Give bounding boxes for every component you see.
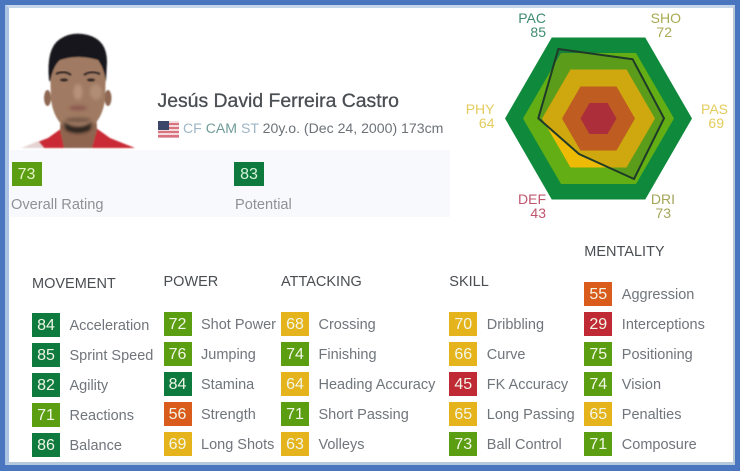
- stat: acceleration: Acceleration: [70, 318, 149, 334]
- stat: agility: Agility: [70, 378, 108, 394]
- stat: volleys: 63: [286, 436, 304, 453]
- stat: finishing: Finishing: [318, 347, 377, 363]
- stat: sprint speed: Sprint Speed: [70, 348, 153, 364]
- stat: volleys: [281, 432, 364, 456]
- heading: attacking: ATTACKING: [281, 274, 362, 290]
- stat: ball control: [449, 432, 562, 456]
- stat: composure: 71: [589, 436, 607, 453]
- stat: jumping: [164, 342, 256, 366]
- stat: vision: Vision: [622, 377, 661, 393]
- stat: balance: [32, 433, 122, 457]
- panel: attacking: [281, 274, 436, 456]
- stat: reactions: 71: [37, 407, 55, 424]
- radar label: DRI: [651, 191, 675, 220]
- radar label: DEF: DEF: [518, 191, 546, 207]
- radar label: PAS: 69: [708, 114, 724, 130]
- stat: long shots: 69: [169, 436, 186, 453]
- stat: jumping: Jumping: [201, 347, 256, 363]
- radar label: PAS: [701, 101, 728, 130]
- radar label: SHO: [651, 10, 681, 40]
- stat: stamina: Stamina: [201, 377, 254, 393]
- radar label: SHO: 72: [656, 24, 672, 40]
- stat: aggression: [584, 282, 694, 306]
- stat: curve: Curve: [487, 347, 525, 363]
- stat: aggression: 55: [589, 286, 607, 303]
- stat: shot power: Shot Power: [201, 317, 276, 333]
- radar label: DRI: DRI: [651, 191, 675, 207]
- stat: stamina: 84: [169, 376, 186, 393]
- stat: interceptions: Interceptions: [622, 317, 705, 333]
- stat: short passing: [281, 402, 409, 426]
- stat: fk accuracy: [449, 372, 568, 396]
- stat: fk accuracy: FK Accuracy: [487, 377, 568, 393]
- stat: heading accuracy: 64: [286, 376, 304, 393]
- radar label: DRI: 73: [655, 204, 671, 220]
- panel: power: [164, 274, 276, 456]
- panel: movement: [32, 276, 153, 457]
- stat: strength: Strength: [201, 407, 256, 423]
- potential badge: 83: [240, 166, 258, 182]
- stat: acceleration: 84: [37, 317, 55, 334]
- stat: crossing: Crossing: [318, 317, 376, 333]
- stat: long shots: [164, 432, 274, 456]
- radar label: PHY: PHY: [466, 101, 494, 117]
- stat: reactions: [32, 403, 134, 427]
- stat: jumping: 76: [169, 346, 186, 363]
- overall rating badge: 73: [18, 166, 35, 182]
- stat: curve: [449, 342, 525, 366]
- radar label: SHO: SHO: [651, 10, 681, 26]
- stat: stamina: [164, 372, 254, 396]
- radar label: PAS: PAS: [701, 101, 728, 117]
- stat: long passing: [449, 402, 575, 426]
- stat: dribbling: Dribbling: [487, 317, 544, 333]
- player details line: [158, 120, 443, 138]
- heading: movement: MOVEMENT: [32, 276, 116, 292]
- stat: finishing: 74: [286, 346, 304, 363]
- heading: power: POWER: [164, 274, 218, 290]
- stat: sprint speed: [32, 343, 153, 367]
- hexagon rings: [505, 38, 692, 200]
- stat: acceleration: [32, 313, 149, 337]
- player stat polygon: [538, 49, 664, 179]
- stat: heading accuracy: [281, 372, 436, 396]
- stat: vision: 74: [589, 376, 607, 393]
- stat: composure: Composure: [622, 437, 697, 453]
- stat: long passing: Long Passing: [487, 407, 575, 423]
- stat: interceptions: [584, 312, 705, 336]
- stat: penalties: 65: [589, 406, 607, 423]
- stat: short passing: 71: [286, 406, 304, 423]
- stat: volleys: Volleys: [318, 437, 364, 453]
- stat: balance: 86: [37, 437, 55, 454]
- stat: long passing: 65: [454, 406, 472, 423]
- radar label: DEF: [518, 191, 546, 220]
- stat: shot power: 72: [169, 316, 186, 333]
- overall rating label: Overall Rating: [11, 197, 103, 213]
- radar label: PAC: 85: [530, 24, 546, 40]
- radar label: PAC: PAC: [518, 10, 546, 26]
- stat: balance: Balance: [70, 438, 122, 454]
- stat: positioning: Positioning: [622, 347, 693, 363]
- stat: strength: [164, 402, 256, 426]
- radar label: PAC: [518, 10, 546, 40]
- player name: Jesús David Ferreira Castro: [158, 90, 399, 112]
- panel: skill: [449, 274, 575, 456]
- position and personal details: CF CAM ST 20y.o. (Dec 24, 2000) 173cm: [183, 120, 443, 136]
- stat: crossing: 68: [286, 316, 304, 333]
- stat: shot power: [164, 312, 276, 336]
- potential label: Potential: [235, 197, 292, 213]
- heading: mentality: MENTALITY: [584, 244, 665, 260]
- stat: sprint speed: 85: [37, 347, 55, 364]
- icon: US flag: [158, 121, 179, 138]
- radar label: DEF: 43: [530, 204, 546, 220]
- radar label: PHY: [466, 101, 494, 130]
- stat: strength: 56: [169, 406, 186, 423]
- stat: penalties: [584, 402, 708, 426]
- stat: vision: [584, 372, 661, 396]
- potential badge: [234, 162, 264, 186]
- stat: finishing: [281, 342, 377, 366]
- panel: mentality: [584, 244, 705, 456]
- panel: ratings: [10, 150, 450, 217]
- stat: agility: 82: [37, 377, 55, 394]
- stat: crossing: [281, 312, 376, 336]
- stat: penalties: Penalties: [622, 407, 681, 423]
- stat: long shots: Long Shots: [201, 437, 274, 453]
- stat: dribbling: [449, 312, 544, 336]
- radar label: PHY: 64: [479, 114, 494, 130]
- stat: curve: 66: [454, 346, 472, 363]
- heading: skill: SKILL: [449, 274, 489, 290]
- stat: ball control: 73: [454, 436, 472, 453]
- overall rating badge: [12, 162, 42, 186]
- stat: short passing: Short Passing: [318, 407, 409, 423]
- stat: dribbling: 70: [454, 316, 472, 333]
- stat: interceptions: 29: [589, 316, 607, 333]
- stat: agility: [32, 373, 108, 397]
- stat: aggression: Aggression: [622, 287, 694, 303]
- player photo: [22, 32, 136, 150]
- stat: ball control: Ball Control: [487, 437, 562, 453]
- stat: reactions: Reactions: [70, 408, 134, 424]
- stat: positioning: [584, 342, 693, 366]
- radar chart: [505, 38, 692, 200]
- stat: positioning: 75: [589, 346, 607, 363]
- stat: composure: [584, 432, 708, 456]
- stat: heading accuracy: Heading Accuracy: [318, 377, 435, 393]
- stat: fk accuracy: 45: [454, 376, 472, 393]
